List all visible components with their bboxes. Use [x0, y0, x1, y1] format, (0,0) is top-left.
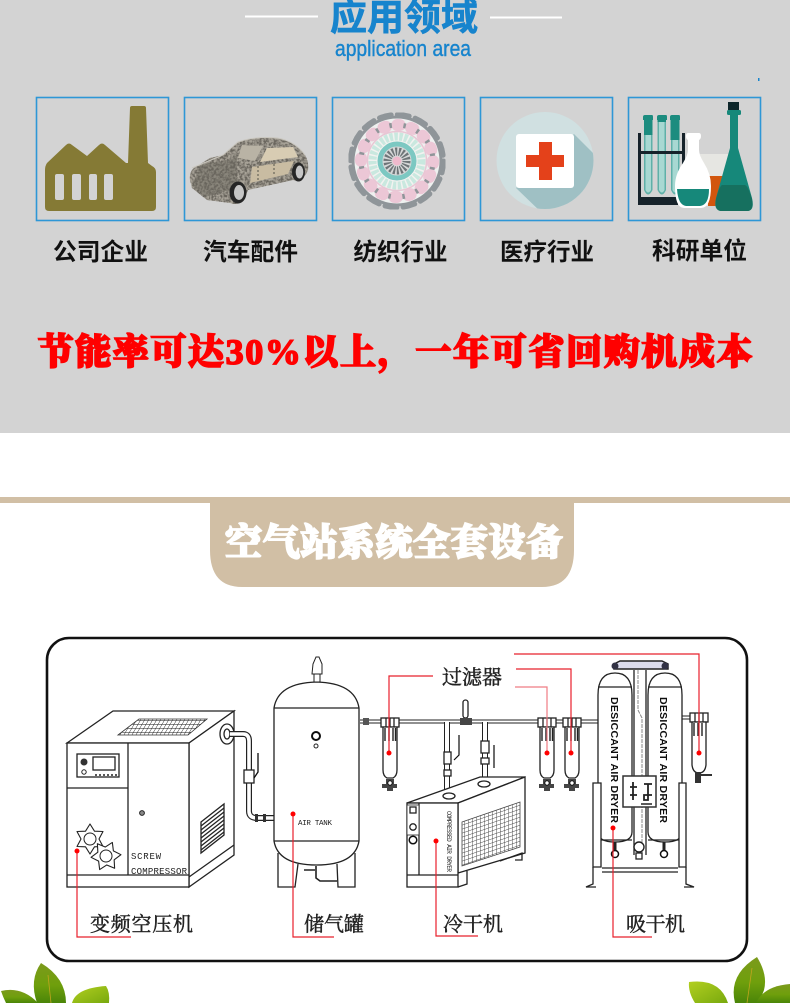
pipe: compressor to tank	[220, 724, 274, 822]
icon: factory	[45, 106, 156, 211]
compressor	[67, 711, 234, 887]
desiccant dryer	[586, 661, 694, 887]
desiccant dryer: DESICCANT AIR DRYER	[608, 697, 620, 823]
air tank: AIR TANK	[298, 820, 332, 828]
callouts: 变频空压机	[90, 913, 193, 936]
section heading: air station equipment: 空气站系统全套设备	[225, 521, 563, 564]
card: textile industry: 纺织行业	[354, 239, 448, 266]
desiccant dryer: DESICCANT AIR DRYER	[657, 697, 669, 823]
card: auto parts	[184, 98, 316, 266]
callouts: 储气罐	[304, 913, 364, 936]
card: medical industry	[480, 98, 620, 266]
card: scientific research	[628, 98, 760, 265]
decoration: leaves right	[689, 957, 790, 1003]
callouts	[74, 654, 702, 937]
callouts: 冷干机	[443, 913, 503, 936]
air tank	[274, 657, 359, 887]
refrigerated dryer: COMPRESSED AIR DRYER	[445, 811, 452, 872]
callouts: 吸干机	[626, 913, 685, 936]
card: auto parts: 汽车配件	[203, 239, 298, 266]
section heading: air station equipment	[0, 497, 790, 587]
panel: application area	[0, 0, 790, 433]
compressor: COMPRESSOR	[131, 867, 188, 877]
refrigerated dryer	[407, 777, 525, 887]
card: medical industry: 医疗行业	[500, 239, 594, 266]
icon: lab glassware	[638, 102, 753, 211]
panel: equipment diagram	[47, 638, 747, 961]
card: scientific research: 科研单位	[652, 237, 747, 265]
filters	[381, 713, 712, 791]
pipeline	[360, 700, 690, 795]
slogan: 节能率可达30%以上，一年可省回购机成本	[38, 331, 752, 373]
heading: application area	[245, 0, 562, 61]
compressor: SCREW	[131, 852, 162, 862]
callouts: 过滤器	[442, 666, 502, 689]
card: company enterprise	[36, 98, 168, 266]
icon: mandala	[350, 114, 444, 208]
icon: car	[190, 138, 308, 204]
card: company enterprise: 公司企业	[53, 239, 148, 266]
decoration: leaves left	[1, 963, 109, 1003]
icon: medical cross	[496, 112, 594, 209]
card: textile industry	[332, 98, 464, 266]
heading: application area: application area	[335, 36, 472, 61]
